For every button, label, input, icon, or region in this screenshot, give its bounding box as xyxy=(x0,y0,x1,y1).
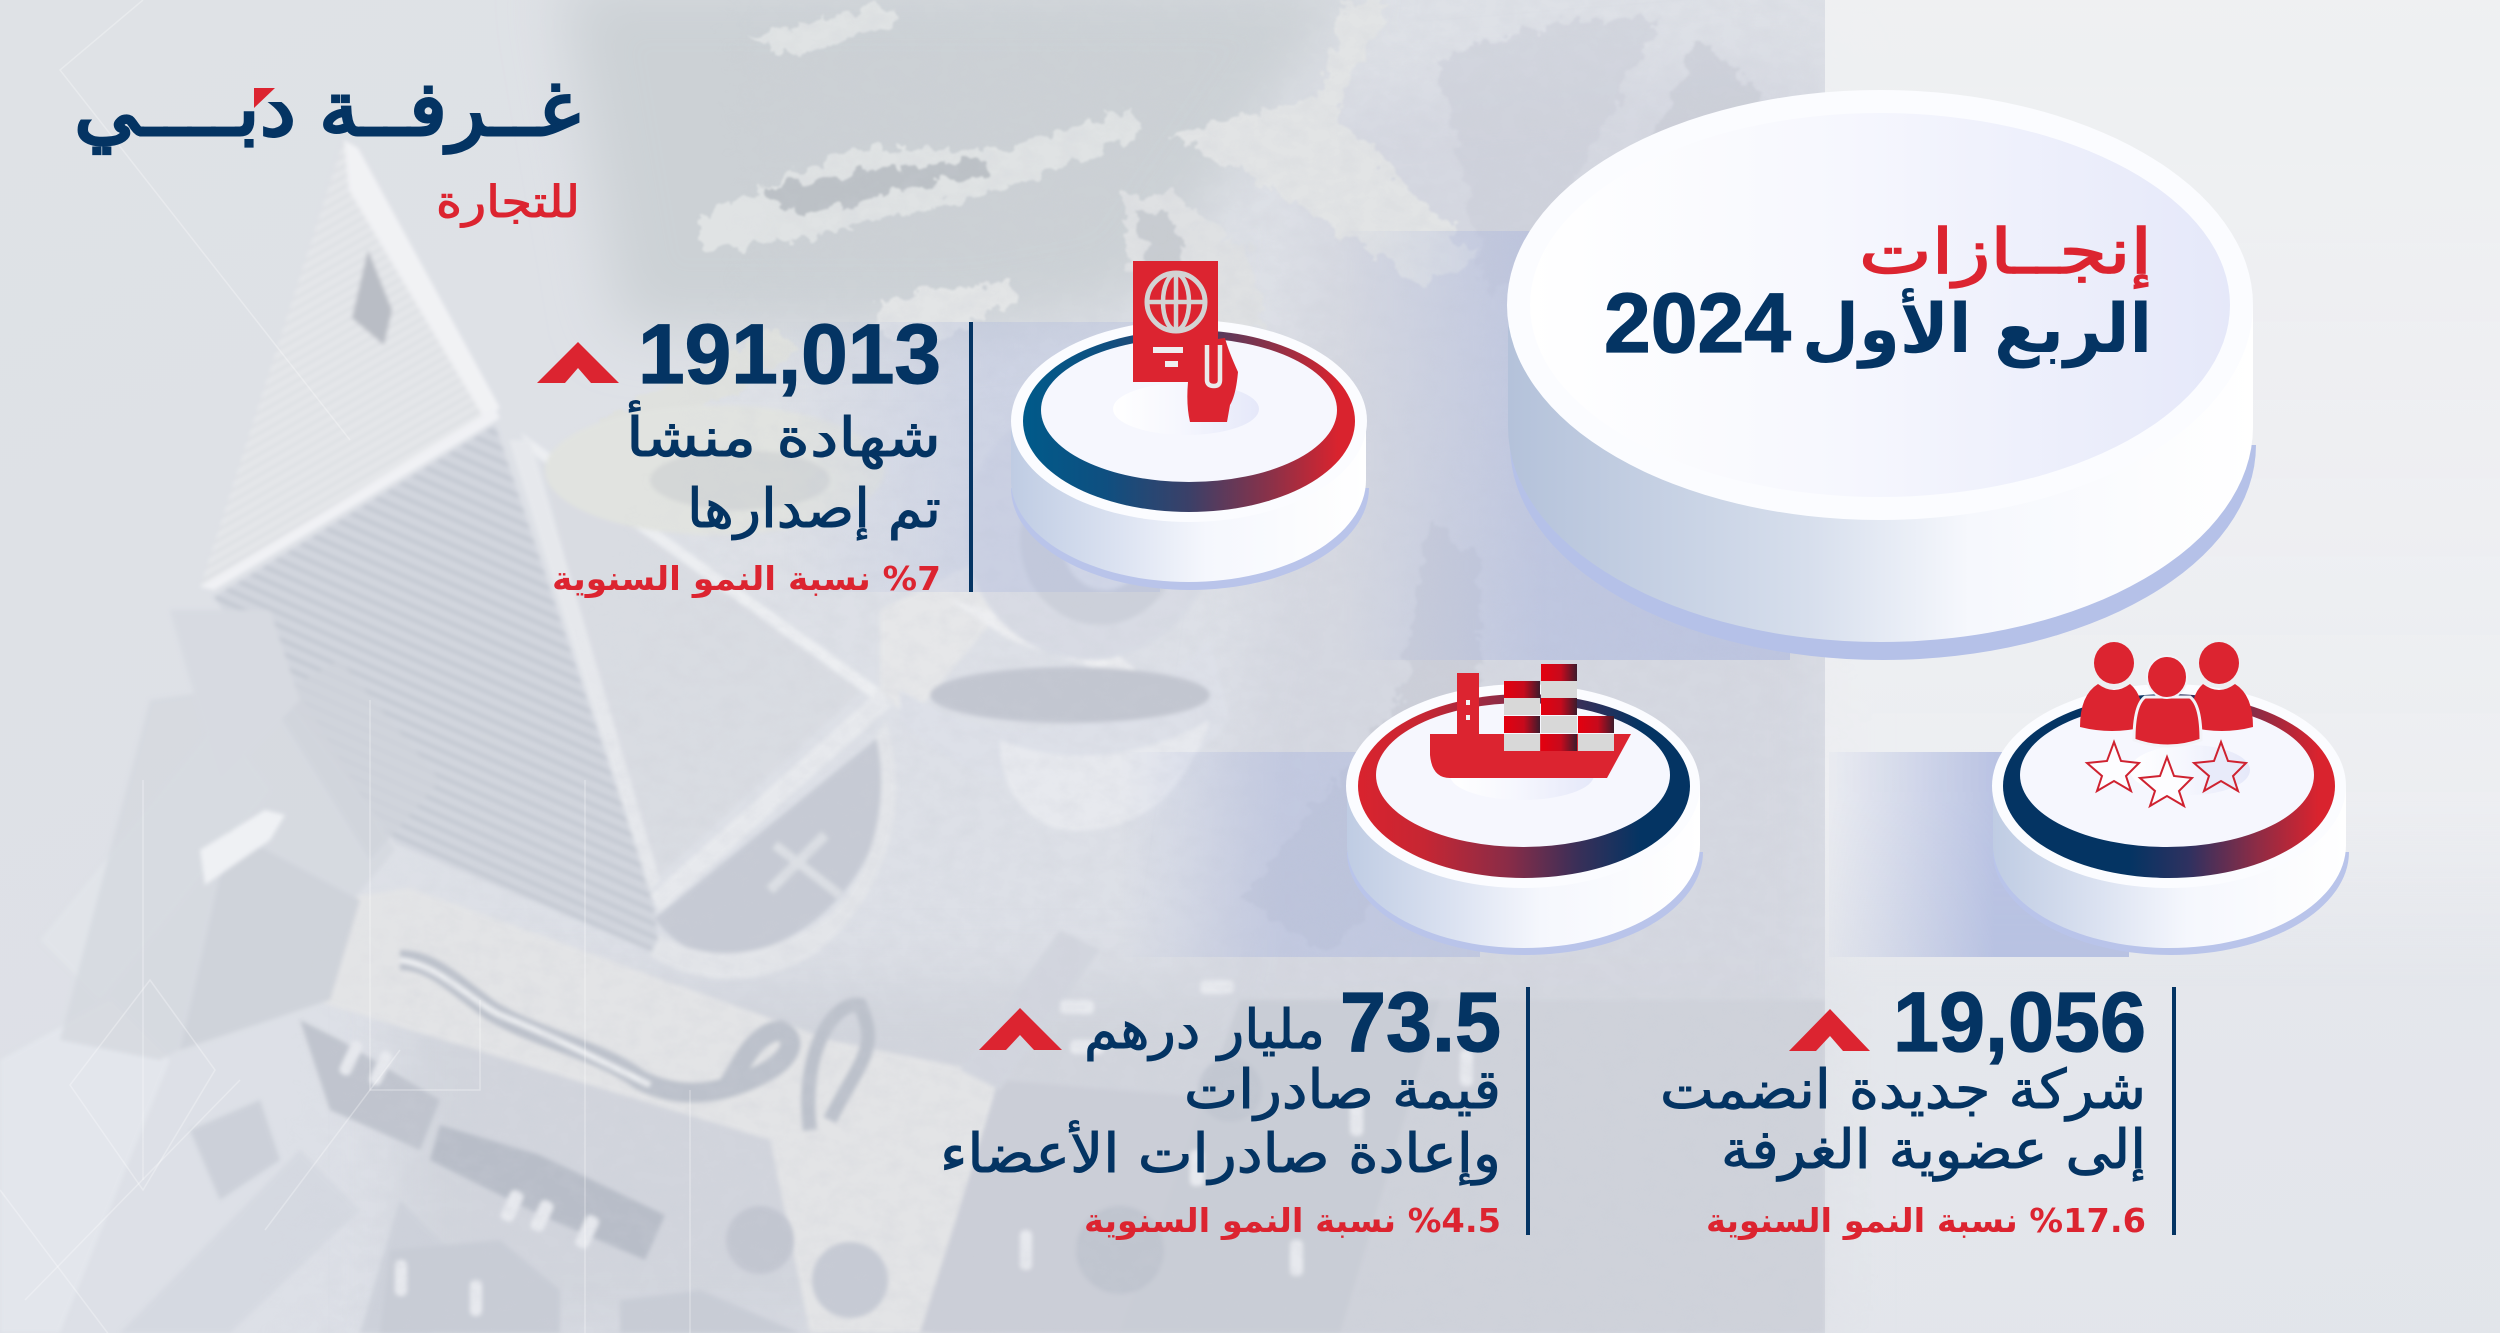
harbour and boats xyxy=(615,1,1760,728)
title line 2 xyxy=(1604,276,2152,370)
round terrace building xyxy=(973,562,1118,660)
stat block: certificates of origin: 191,013 xyxy=(638,307,941,401)
icon: three stars xyxy=(2087,742,2246,806)
stat block: exports: 73.5 xyxy=(1340,975,1501,1069)
disc: exports xyxy=(1346,664,1703,955)
disc: certificates of origin xyxy=(1011,261,1369,590)
stat block: exports: مليار درهم xyxy=(1084,998,1325,1061)
stat block: certificates of origin: شهادة منشأ xyxy=(626,400,941,469)
logo: Dubai Chamber for Trade: للتجارة xyxy=(436,177,580,228)
stat block: new members: شركة جديدة انضمت xyxy=(1660,1058,2146,1121)
promenade band xyxy=(280,888,1000,1333)
stat block: exports: وإعادة صادرات الأعضاء xyxy=(940,1120,1501,1185)
white plaza and curve xyxy=(882,580,986,704)
arrow up xyxy=(537,342,619,383)
stat block: new members: 19,056 xyxy=(1893,975,2146,1069)
stat block: exports: قيمة صادرات xyxy=(1184,1058,1501,1121)
stat block: exports: %4.5 نسبة النمو السنوية xyxy=(1084,1201,1501,1241)
dark landscaping strip xyxy=(63,740,380,1058)
stat block: certificates of origin: تم إصدارها xyxy=(687,477,941,540)
logo: Dubai Chamber for Trade: دبــــي xyxy=(74,64,296,154)
disc: new members xyxy=(1992,642,2349,955)
chain sculpture xyxy=(400,960,868,1130)
tower triangle xyxy=(200,140,495,587)
icon: passport and hand xyxy=(1133,261,1238,422)
arrow up xyxy=(979,1008,1062,1050)
light panel on right xyxy=(1825,0,2500,1333)
parked cars and palm trees xyxy=(190,930,1825,1333)
stat block: certificates of origin: %7 نسبة النمو السنوية xyxy=(552,559,941,599)
logo: Dubai Chamber for Trade: غــرفــة xyxy=(319,64,580,154)
main disc: title xyxy=(1507,90,2256,660)
landscape plaza xyxy=(547,447,810,530)
arc building xyxy=(655,731,890,957)
stat block: certificates of origin xyxy=(537,307,973,599)
stat block: exports xyxy=(940,975,1530,1241)
big roof triangle xyxy=(540,460,861,887)
logo: Dubai Chamber for Trade xyxy=(74,64,580,228)
stat block: new members xyxy=(1660,975,2176,1241)
title line 2: الربع الأول xyxy=(1802,287,2152,369)
arrow up xyxy=(1789,1009,1870,1051)
boat xyxy=(200,810,285,885)
icon: container ship xyxy=(1430,664,1631,778)
stat block: new members: إلى عضوية الغرفة xyxy=(1721,1118,2146,1181)
stat block: new members: %17.6 نسبة النمو السنوية xyxy=(1706,1201,2146,1241)
dark facade with stripes xyxy=(214,425,660,955)
title line 1: إنجــازات xyxy=(1859,215,2152,289)
disc shadows xyxy=(1340,231,1790,660)
title line 2: 2024 xyxy=(1604,276,1791,370)
icon: three people xyxy=(2080,642,2253,746)
